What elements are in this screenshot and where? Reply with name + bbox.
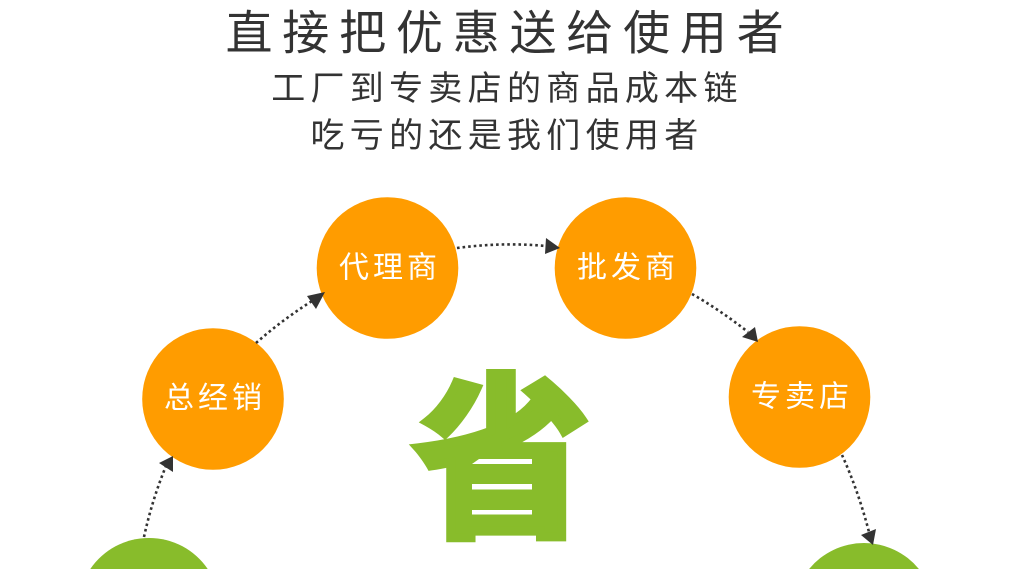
node: 总经销: 总经销 (164, 382, 266, 415)
arrow: 总经销 to 代理商 (256, 292, 325, 343)
node: 专卖店: 专卖店 (751, 380, 853, 414)
title: 直接把优惠送给使用者 (226, 6, 794, 60)
central character 省: 省 (414, 365, 590, 560)
node: green start circle (90, 538, 208, 569)
node: 批发商 (555, 197, 696, 339)
node: 专卖店 (729, 326, 870, 468)
node: 代理商 (317, 197, 458, 339)
subtitle line 2: 吃亏的还是我们使用者 (310, 117, 704, 155)
node: 总经销 (142, 328, 284, 470)
arrow: green start to 总经销 (144, 456, 173, 537)
node: 代理商: 代理商 (339, 252, 441, 284)
arrow: 代理商 to 批发商 (457, 238, 560, 254)
arrow: 批发商 to 专卖店 (692, 294, 758, 342)
arrow: 专卖店 to green end (842, 455, 876, 545)
node: 批发商: 批发商 (577, 252, 679, 284)
node: green end circle (809, 543, 919, 569)
subtitle line 1: 工厂到专卖店的商品成本链 (271, 70, 743, 108)
